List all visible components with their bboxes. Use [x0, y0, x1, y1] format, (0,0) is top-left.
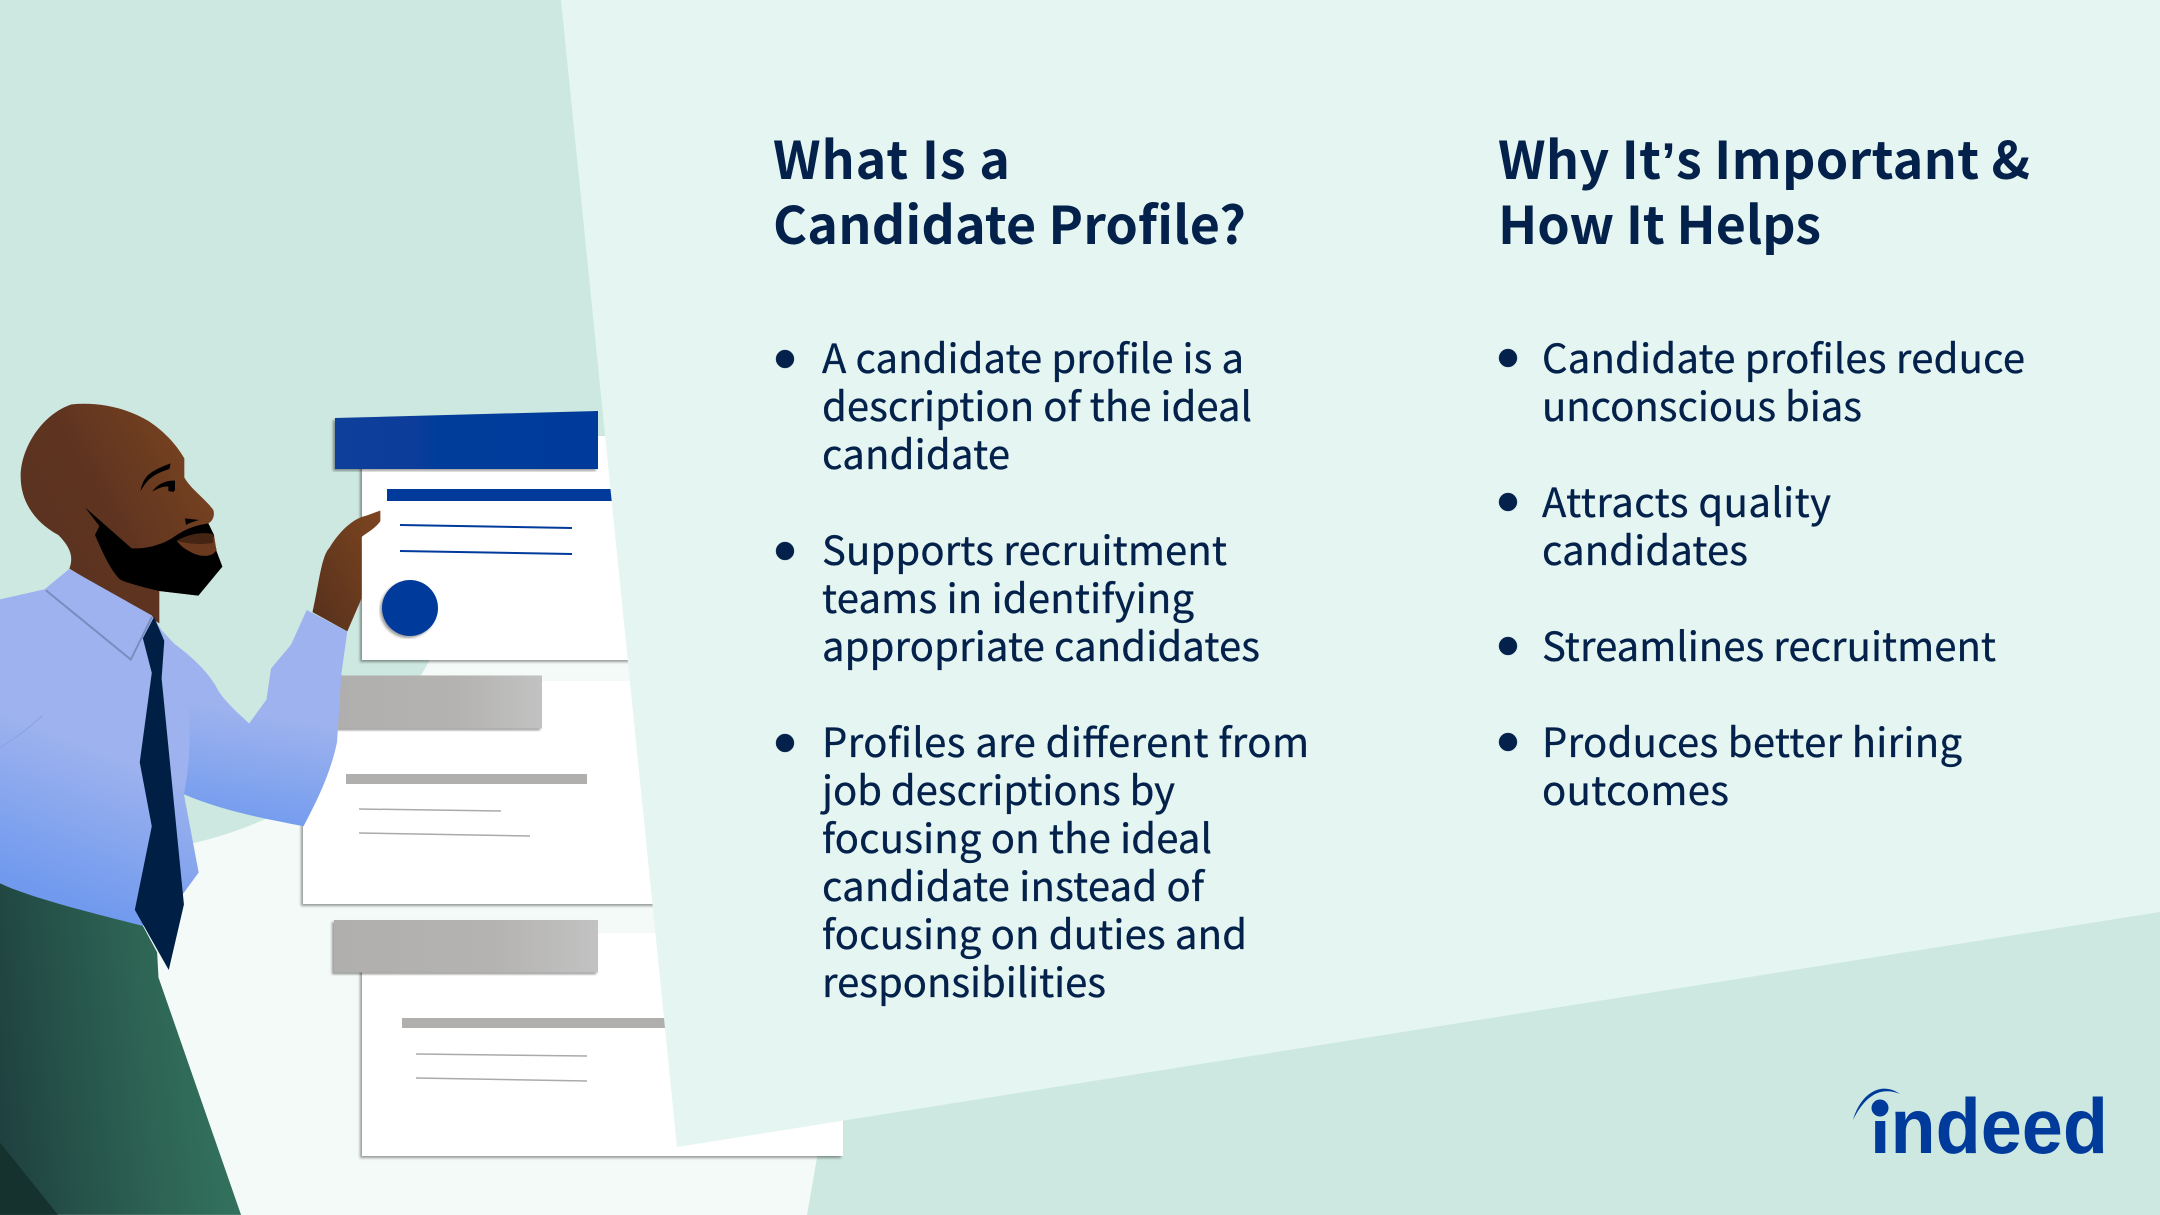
background: top-left green shape — [0, 0, 640, 860]
bullet list: definition points: appropriate candidates — [822, 615, 1260, 673]
card 1 — [335, 411, 682, 660]
bullet list: definition points: Profiles are different from — [822, 711, 1309, 769]
body, arm and tie — [0, 510, 380, 1215]
bullet list: benefits: outcomes — [1542, 759, 1729, 817]
bullet list: benefits: Streamlines recruitment — [1542, 615, 1996, 673]
bullet list: definition points: candidate — [822, 423, 1010, 481]
bullet list: benefits: candidates — [1542, 519, 1748, 577]
bullet list: definition points: focusing on the ideal — [822, 807, 1212, 865]
background: light content panel — [561, 0, 2160, 1147]
illustration: man holding profile — [0, 404, 380, 1215]
heading: why it's important — [1498, 119, 2030, 259]
bullet list: definition points: focusing on duties and — [822, 903, 1247, 961]
head with beard and face — [21, 404, 222, 623]
heading: what is a candidate profile: Candidate Profile? — [773, 184, 1246, 259]
logo: indeed: indeed — [1870, 1082, 2108, 1170]
bullet list: definition points: teams in identifying — [822, 567, 1194, 625]
illustration: candidate profile cards — [303, 411, 843, 1156]
heading: why it's important: Why It’s Important & — [1498, 119, 2030, 194]
heading: why it's important: How It Helps — [1498, 184, 1821, 259]
bullet list: definition points: job descriptions by — [820, 759, 1175, 817]
bullet list: definition points — [776, 327, 1309, 1009]
bullet list: definition points: description of the ideal — [822, 375, 1252, 433]
bullet list: benefits: Produces better hiring — [1542, 711, 1962, 769]
bullet list: benefits: unconscious bias — [1542, 375, 1862, 433]
bullet list: benefits: Attracts quality — [1542, 471, 1831, 529]
bullet list: definition points: candidate instead of — [822, 855, 1206, 913]
heading: what is a candidate profile — [773, 119, 1246, 259]
bullet list: definition points: A candidate profile is a — [822, 327, 1244, 385]
bullet list: definition points: responsibilities — [822, 951, 1106, 1009]
right column — [1498, 119, 2030, 817]
bullet list: benefits: Candidate profiles reduce — [1542, 327, 2025, 385]
logo: indeed — [1853, 1088, 2104, 1154]
heading: what is a candidate profile: What Is a — [773, 119, 1010, 194]
card 2 — [303, 676, 703, 904]
left column — [773, 119, 1309, 1009]
card 3 — [334, 920, 843, 1156]
bullet list: definition points: Supports recruitment — [822, 519, 1227, 577]
bullet list: benefits — [1499, 327, 2025, 817]
background: bottom-right green shape — [807, 880, 2160, 1215]
